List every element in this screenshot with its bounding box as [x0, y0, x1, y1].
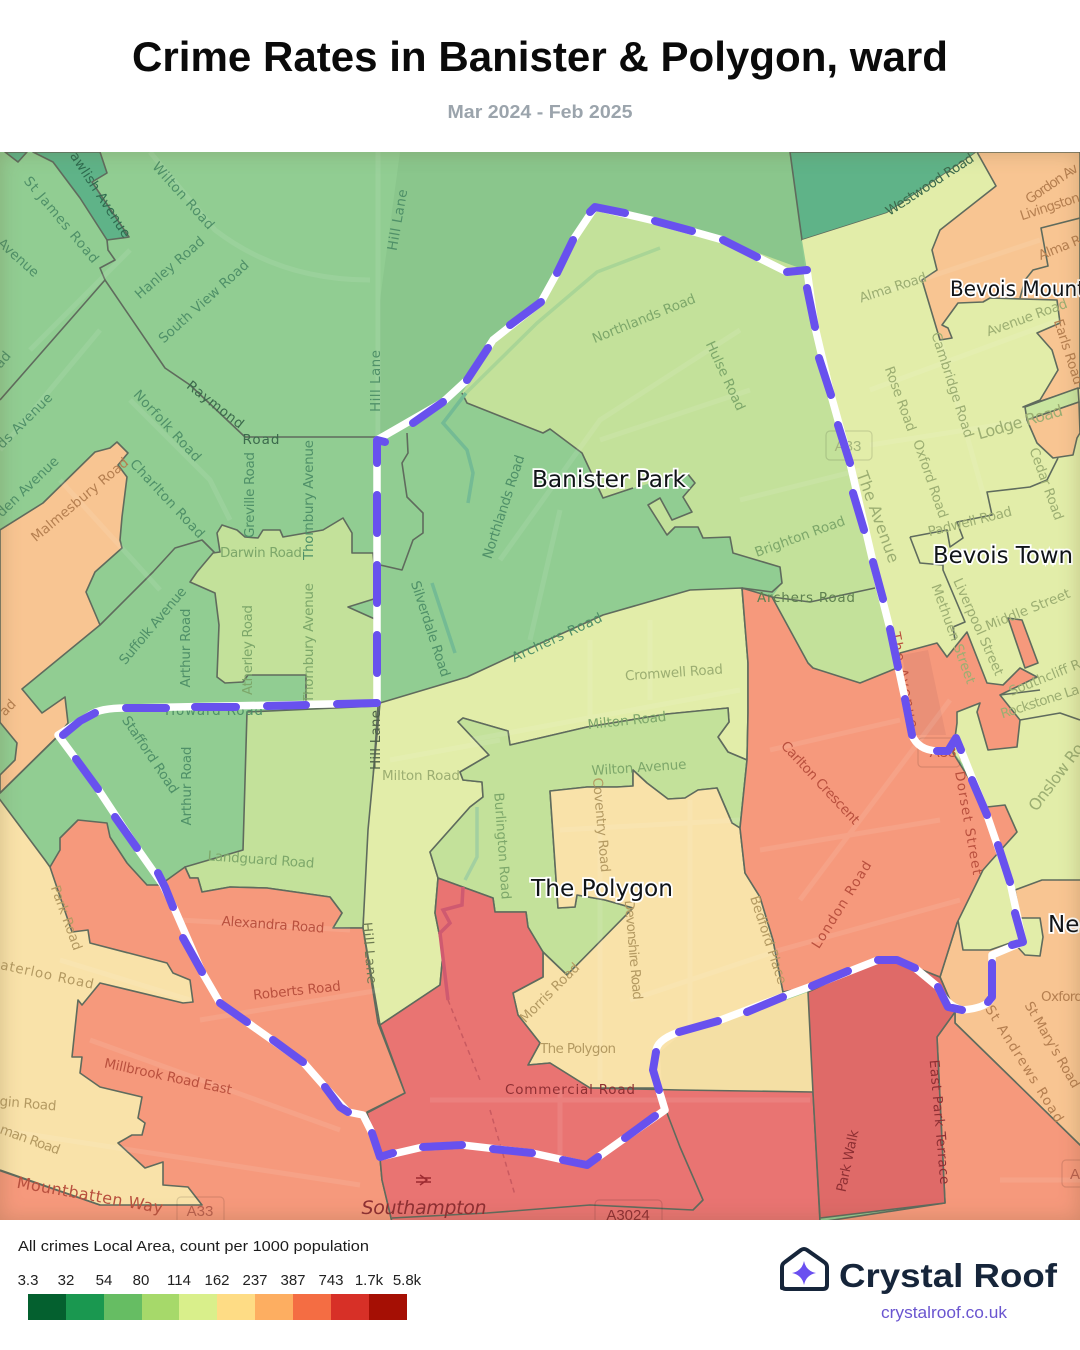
road labels — [0, 149, 1080, 1219]
river and rail detail — [432, 248, 660, 1195]
road labels: Gordon Av — [1023, 161, 1080, 207]
road labels: Northlands Road — [590, 291, 698, 347]
road number shields: A33 — [930, 744, 956, 761]
road number shields: A3024 — [606, 1207, 650, 1224]
boundary purple dashes — [63, 207, 1023, 1165]
logo: Crystal Roof — [782, 1249, 1058, 1322]
road labels: Hanley Road — [132, 233, 208, 303]
road labels: Devonshire Road — [621, 899, 645, 1001]
legend scale values: 54 — [96, 1272, 112, 1289]
place name labels — [530, 277, 1080, 938]
website address: crystalroof.co.uk — [881, 1304, 1008, 1322]
road labels: Thornbury Avenue — [301, 583, 317, 704]
road labels: Oxford Road — [909, 438, 951, 520]
road labels: awlish Avenue — [66, 149, 134, 241]
road labels: Arthur Road — [178, 608, 194, 688]
road labels: St Andrews Road — [981, 1003, 1067, 1125]
road labels: Commercial Road — [505, 1082, 635, 1098]
road labels: Silverdale Road — [407, 579, 453, 679]
road labels: East Park Terrace — [926, 1059, 952, 1185]
subtitle: date range: Mar 2024 - Feb 2025 — [448, 102, 632, 122]
road number shields: A33 — [835, 438, 861, 455]
road labels: Wilton Road — [149, 159, 217, 233]
road labels: Arthur Road — [179, 746, 195, 826]
road labels: Morris Road — [517, 960, 583, 1026]
place name labels: Banister Park — [532, 467, 687, 493]
road labels: Archers Road — [509, 610, 605, 666]
legend colour swatches — [28, 1294, 407, 1320]
crime rate area polygons — [0, 152, 1080, 1222]
road number shields: A — [1070, 1166, 1080, 1183]
logo wordmark: Crystal Roof — [839, 1257, 1058, 1294]
legend scale values: 1.7k — [355, 1272, 384, 1289]
road labels: Cedar Road — [1025, 446, 1067, 522]
road labels: Northlands Road — [480, 453, 528, 561]
road labels: Thornbury Avenue — [301, 440, 317, 561]
road labels: Milton Road — [382, 768, 460, 784]
road labels: Hill Lane — [368, 710, 384, 770]
road number shields: A33 — [187, 1203, 213, 1220]
road labels: Southampton — [362, 1197, 486, 1219]
legend scale values: 162 — [204, 1272, 230, 1289]
road labels: Raymond — [183, 378, 247, 432]
road labels: Methuen Street — [928, 582, 978, 686]
road labels: Hill Lane — [368, 350, 384, 412]
road labels: Cromwell Road — [625, 662, 723, 684]
road labels: Rockstone La — [999, 682, 1080, 722]
boundary lines between areas — [0, 218, 1080, 1218]
road labels: Hulse Road — [702, 339, 748, 413]
road labels: Burlington Road — [490, 792, 514, 900]
place name labels: Ne — [1048, 912, 1079, 938]
road labels: Charlton Road — [126, 456, 208, 542]
place name labels: The Polygon — [530, 876, 673, 902]
road labels: Lodge Road — [975, 401, 1065, 443]
legend — [18, 1239, 422, 1320]
road labels: Darwin Road — [220, 545, 302, 561]
road labels: Greville Road — [242, 452, 258, 538]
legend scale values: 3.3 — [18, 1272, 38, 1289]
road labels: The Polygon — [539, 1041, 616, 1057]
road labels: Wilton Avenue — [591, 757, 687, 779]
road network — [0, 152, 1080, 1185]
road labels: South View Road — [156, 257, 252, 347]
legend scale values: 80 — [133, 1272, 149, 1289]
road labels: Malmesbury Road — [28, 455, 132, 545]
road labels: Norfolk Road — [130, 387, 204, 465]
ward boundary: white line with purple dashes — [58, 207, 1023, 1165]
legend scale values: 5.8k — [393, 1272, 422, 1289]
road number shields — [177, 431, 1080, 1230]
legend title: All crimes Local Area, count per 1000 population — [18, 1239, 369, 1255]
road labels: Dorset Street — [951, 770, 985, 876]
road labels: Padwell Road — [926, 504, 1014, 540]
road labels: Hill Lane — [358, 921, 380, 985]
road labels: Avenue Road — [984, 296, 1070, 340]
road labels: Middle Street — [983, 586, 1073, 634]
road labels: Westwood Road — [883, 151, 977, 219]
road labels: Carlton Crescent — [777, 738, 863, 828]
boundary white base — [58, 207, 1023, 1165]
road labels: The Avenue — [887, 630, 921, 729]
road labels: St James Road — [20, 173, 102, 267]
map base: green areas — [0, 152, 966, 1220]
road labels: Landguard Road — [207, 848, 315, 872]
road labels: Coventry Road — [589, 777, 613, 873]
place name labels: Bevois Town — [933, 543, 1073, 569]
road labels: Archers Road — [757, 590, 855, 606]
legend scale values: 387 — [280, 1272, 306, 1289]
road labels: Road — [242, 432, 280, 448]
road labels: Alexandra Road — [221, 913, 325, 937]
road labels: Alma Road — [857, 270, 929, 306]
road labels: Millbrook Road East — [103, 1056, 233, 1098]
road labels: Rose Road — [881, 364, 919, 434]
road labels: Park Road — [47, 883, 85, 953]
road labels: Stafford Road — [118, 713, 182, 797]
road labels: Mountbatten Way — [15, 1173, 165, 1217]
icon: house with star — [782, 1249, 827, 1289]
road labels: Bedford Place — [746, 894, 790, 986]
road labels: Brighton Road — [753, 513, 847, 561]
road labels: The Avenue — [852, 468, 903, 565]
road labels: London Road — [809, 858, 875, 952]
road labels: Hill Lane — [385, 188, 411, 252]
road labels: aterloo Road — [0, 957, 95, 993]
road labels: Howard Road — [165, 703, 263, 719]
road labels: Milton Road — [587, 709, 667, 733]
legend scale values: 32 — [58, 1272, 74, 1289]
road labels: Cambridge Road — [927, 330, 977, 440]
road labels: Roberts Road — [252, 978, 342, 1004]
road labels: Park Walk — [834, 1128, 862, 1193]
road labels: Liverpool Street — [949, 576, 1007, 678]
road labels: Suffolk Avenue — [116, 584, 190, 668]
legend scale values — [18, 1272, 422, 1289]
icon: railway station — [416, 1175, 431, 1185]
legend scale values: 237 — [242, 1272, 268, 1289]
legend scale values: 114 — [167, 1272, 191, 1289]
road labels: Atherley Road — [240, 605, 256, 695]
title: Crime Rates in Banister & Polygon, ward — [132, 33, 948, 80]
road labels: gin Road — [0, 1094, 57, 1114]
legend scale values: 743 — [318, 1272, 344, 1289]
